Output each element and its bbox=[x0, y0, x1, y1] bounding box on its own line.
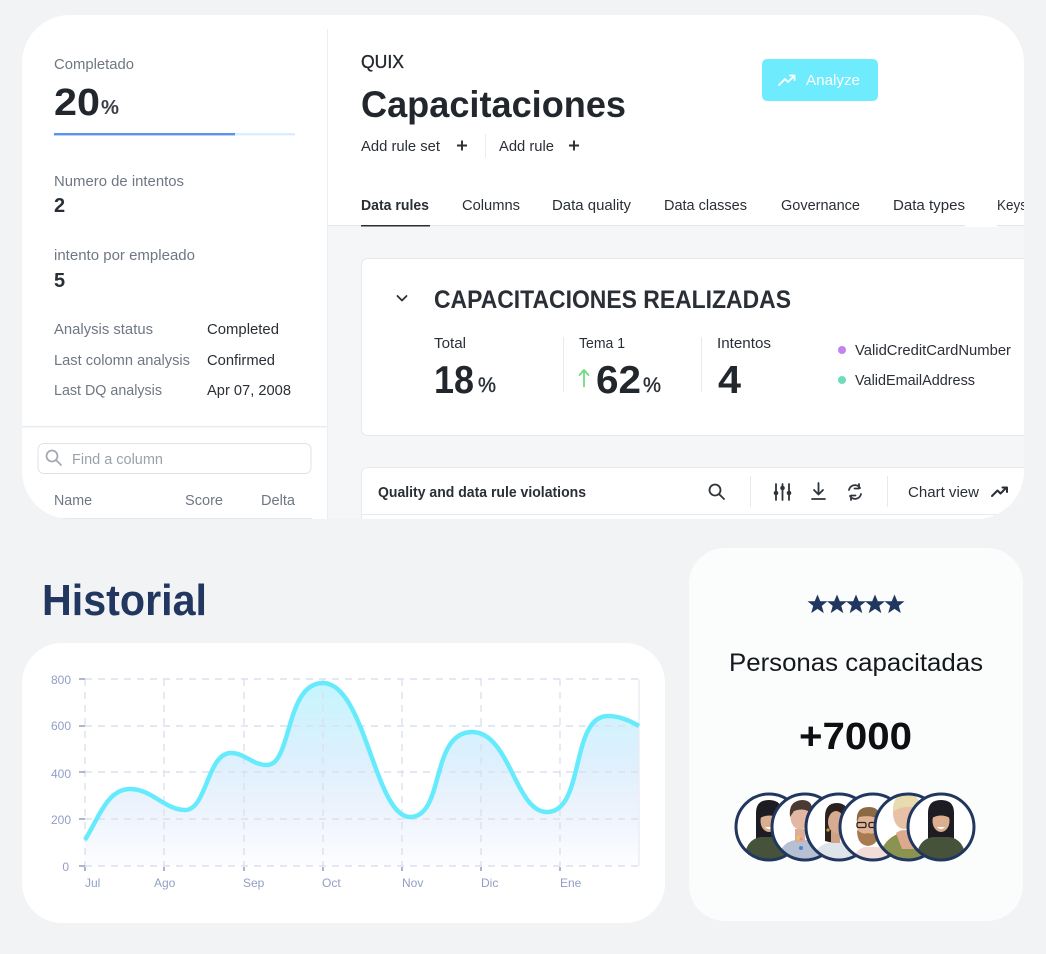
add rule actions: Add rule bbox=[499, 139, 554, 155]
panel: area chart card bbox=[22, 643, 665, 923]
tab bar: Columns bbox=[462, 198, 520, 214]
column list header: Name bbox=[54, 493, 92, 509]
avatar 1 bbox=[734, 792, 787, 862]
stat: intentos bbox=[718, 338, 770, 393]
stat: tema 1: Tema 1 bbox=[579, 336, 625, 352]
avatar group bbox=[736, 794, 974, 861]
avatar 5 bbox=[874, 792, 924, 862]
icon: download bbox=[812, 483, 825, 499]
quix label: QUIX bbox=[361, 52, 404, 72]
analysis details: Confirmed bbox=[207, 353, 275, 369]
icon: five stars bbox=[808, 594, 904, 613]
column list header: Delta bbox=[261, 493, 296, 509]
icon: refresh bbox=[849, 484, 861, 500]
stat: tema 1 bbox=[578, 338, 660, 394]
intento por empleado: intento por empleado bbox=[54, 248, 195, 264]
completado value: % bbox=[101, 97, 119, 119]
analysis details: Apr 07, 2008 bbox=[207, 383, 291, 399]
chart view action bbox=[908, 486, 1008, 497]
chart grid bbox=[85, 679, 639, 866]
data line bbox=[85, 683, 639, 840]
panel: personas capacitadas bbox=[689, 548, 1023, 921]
add rule actions: Add rule set bbox=[361, 139, 440, 155]
stat: tema 1: 62 bbox=[596, 359, 641, 402]
numero de intentos: Numero de intentos bbox=[54, 174, 184, 190]
intento por empleado bbox=[54, 249, 194, 287]
icon: sliders bbox=[775, 484, 790, 500]
y axis labels bbox=[51, 673, 71, 874]
analysis details: Last DQ analysis bbox=[54, 383, 162, 399]
axis ticks bbox=[79, 679, 560, 871]
panel: page header bbox=[361, 52, 878, 158]
avatar 6 bbox=[908, 794, 974, 861]
search field bbox=[38, 444, 311, 474]
tab bar: Data rules bbox=[361, 198, 429, 214]
completado label: Completado bbox=[54, 57, 134, 73]
x axis labels: Jul bbox=[85, 876, 100, 890]
y axis labels: 400 bbox=[51, 767, 71, 781]
x axis labels: Ago bbox=[154, 876, 176, 890]
avatar 2 bbox=[770, 792, 822, 862]
stat: total bbox=[434, 337, 496, 394]
card heading: Personas capacitadas bbox=[729, 649, 983, 677]
intento por empleado: 5 bbox=[54, 270, 65, 292]
stat: intentos: Intentos bbox=[717, 336, 771, 352]
numero de intentos bbox=[54, 175, 184, 212]
table heading: Quality and data rule violations bbox=[378, 485, 586, 501]
stat: total: 18 bbox=[434, 359, 474, 402]
x axis labels: Ene bbox=[560, 876, 582, 890]
section heading: CAPACITACIONES REALIZADAS bbox=[434, 286, 791, 314]
chart view action: Chart view bbox=[908, 485, 979, 501]
analysis details: Completed bbox=[207, 322, 279, 338]
x axis labels: Sep bbox=[243, 876, 265, 890]
y axis labels: 800 bbox=[51, 673, 71, 687]
avatar 4 bbox=[838, 792, 890, 862]
column list header bbox=[54, 493, 312, 519]
x axis labels: Nov bbox=[402, 876, 423, 890]
heading: historial: Historial bbox=[42, 576, 207, 625]
big number: +7000 bbox=[799, 716, 912, 758]
tab bar: Data classes bbox=[664, 198, 747, 214]
icon: chevron bbox=[398, 296, 406, 300]
panel: capacitaciones realizadas bbox=[362, 258, 1046, 436]
search field: Find a column bbox=[72, 452, 163, 468]
tab bar: Keys bbox=[997, 198, 1027, 214]
icon: search bbox=[710, 484, 724, 499]
tab bar: Data quality bbox=[552, 198, 632, 214]
y axis labels: 0 bbox=[62, 860, 69, 874]
x axis labels: Oct bbox=[322, 876, 341, 890]
completado value: 20 bbox=[54, 82, 100, 124]
tab bar: Data types bbox=[893, 198, 965, 214]
panel: main dashboard window bbox=[22, 15, 1046, 538]
x axis labels: Dic bbox=[481, 876, 498, 890]
analysis details: Last colomn analysis bbox=[54, 353, 190, 369]
y axis labels: 600 bbox=[51, 719, 71, 733]
analysis details: Analysis status bbox=[54, 322, 153, 338]
tab bar: Governance bbox=[781, 198, 860, 214]
panel: quality and data rule violations bbox=[361, 467, 1024, 519]
analyze button: Analyze bbox=[806, 73, 860, 89]
analysis details bbox=[54, 322, 291, 399]
stat: tema 1: % bbox=[643, 374, 661, 397]
title: Capacitaciones bbox=[361, 84, 626, 125]
stat: total: % bbox=[478, 374, 496, 397]
stat: total: Total bbox=[434, 336, 466, 352]
y axis labels: 200 bbox=[51, 813, 71, 827]
progress bar bbox=[54, 133, 295, 135]
tab bar bbox=[328, 198, 1027, 227]
legend bbox=[838, 344, 1011, 385]
legend: ValidCreditCardNumber bbox=[855, 343, 1011, 359]
numero de intentos: 2 bbox=[54, 195, 65, 217]
add rule actions bbox=[361, 134, 579, 158]
avatar 3 bbox=[804, 792, 856, 862]
stat: intentos: 4 bbox=[718, 359, 741, 402]
completado value bbox=[55, 88, 118, 116]
panel: summary sidebar bbox=[22, 57, 327, 519]
column list header: Score bbox=[185, 493, 223, 509]
x axis labels bbox=[85, 876, 582, 890]
analyze button bbox=[762, 59, 878, 101]
area fill bbox=[85, 683, 639, 866]
legend: ValidEmailAddress bbox=[855, 373, 975, 389]
